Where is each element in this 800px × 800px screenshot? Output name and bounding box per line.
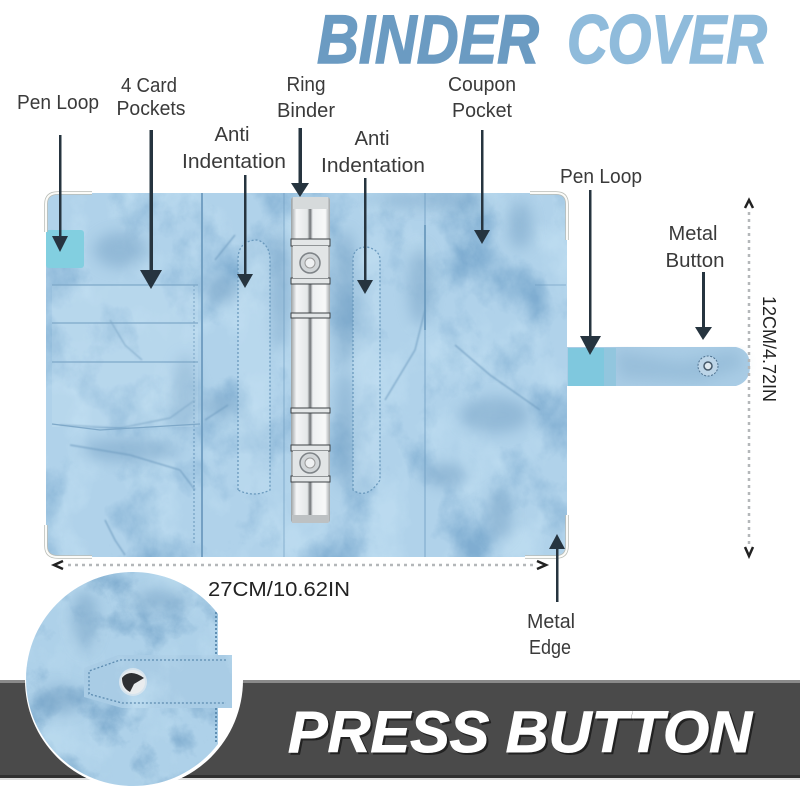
labels: Anti <box>214 124 250 146</box>
labels: Metal <box>527 611 575 633</box>
dimension: height: 12CM/4.72IN <box>759 296 779 402</box>
strap <box>566 347 750 386</box>
labels: Pocket <box>452 100 512 122</box>
metal button on strap <box>698 356 718 376</box>
labels: Coupon <box>448 74 516 96</box>
labels: Indentation <box>182 151 286 173</box>
labels: Indentation <box>321 155 425 177</box>
ring binder <box>291 197 330 523</box>
press button banner <box>0 680 800 780</box>
labels: Anti <box>354 128 390 150</box>
banner text: PRESS BUTTON <box>288 700 753 765</box>
dimension: width <box>54 561 546 601</box>
card pockets <box>52 285 200 430</box>
labels: Pockets <box>116 98 186 120</box>
title <box>317 1 767 78</box>
metal snap <box>119 668 147 696</box>
dimension: width: 27CM/10.62IN <box>208 579 350 601</box>
marble leather <box>46 193 567 557</box>
arrows <box>52 128 712 602</box>
title: BINDER <box>317 1 539 78</box>
press button detail circle <box>20 570 243 790</box>
labels: Pen Loop <box>17 92 99 114</box>
labels: Pen Loop <box>560 166 642 188</box>
darker marble clouds <box>80 193 532 541</box>
panel seams <box>194 193 566 557</box>
anti indentation strips <box>238 240 380 494</box>
labels: Button <box>666 250 724 272</box>
labels: 4 Card <box>121 75 177 97</box>
labels: Edge <box>529 637 571 659</box>
banner text: PRESS BUTTON <box>290 702 755 767</box>
teal pen loop <box>46 230 84 268</box>
open binder cover <box>46 193 750 557</box>
metal corners <box>46 193 567 557</box>
labels: Ring <box>286 74 326 96</box>
strap close-up <box>84 655 232 708</box>
labels: Metal <box>668 223 718 245</box>
dimension: height <box>745 200 779 556</box>
labels: Binder <box>277 100 335 122</box>
labels <box>17 74 724 659</box>
